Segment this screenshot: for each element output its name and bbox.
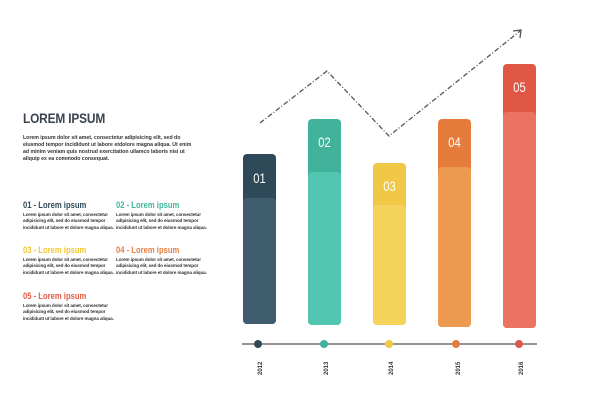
item 03 [23,245,114,275]
item 01: Lorem ipsum dolor sit amet, consectetur adipisicing elit, sed do eiusmod tempor incididunt ut labore et dolore magna aliqua. [23,212,114,230]
item 03: 03 - Lorem ipsum [23,245,86,255]
arrow: trend line [260,30,521,136]
bar 05: 05 [513,80,526,95]
bar 01: 01 [253,171,266,186]
item 02: Lorem ipsum dolor sit amet, consectetur adipisicing elit, sed do eiusmod tempor incididunt ut labore et dolore magna aliqua. [116,212,207,230]
bar 04: 04 [448,135,461,150]
bar 05 [503,64,536,328]
item 01 [23,200,114,230]
item 03: Lorem ipsum dolor sit amet, consectetur adipisicing elit, sed do eiusmod tempor incididunt ut labore et dolore magna aliqua. [23,257,114,275]
item 04: Lorem ipsum dolor sit amet, consectetur adipisicing elit, sed do eiusmod tempor incididunt ut labore et dolore magna aliqua. [116,257,207,275]
year labels: 2016 [519,361,525,375]
intro text: Lorem ipsum dolor sit amet, consectetur adipisicing elit, sed do eiusmod tempor incididunt ut labore etdolore magna aliqua. Ut enim ad minim veniam quis nostrud exercitation ullamco laboris nisi ut aliquip ex ea commodo consequat. [23,135,191,162]
item 04: 04 - Lorem ipsum [116,245,179,255]
bar 02: 02 [318,135,331,150]
year labels [258,361,525,375]
bar 03: 03 [383,179,396,194]
item 02: 02 - Lorem ipsum [116,200,179,210]
bar 01 [243,154,276,324]
year labels: 2013 [324,361,330,375]
item 04 [116,245,207,275]
item 02 [116,200,207,230]
item 05: Lorem ipsum dolor sit amet, consectetur adipisicing elit, sed do eiusmod tempor incididunt ut labore et dolore magna aliqua. [23,303,114,321]
year labels: 2015 [456,361,462,375]
title: LOREM IPSUM [23,110,105,126]
bar 02 [308,119,341,325]
year labels: 2014 [389,361,395,375]
item 05: 05 - Lorem ipsum [23,291,86,301]
timeline axis [242,340,537,348]
bar 04 [438,119,471,327]
item 01: 01 - Lorem ipsum [23,200,86,210]
item 05 [23,291,114,321]
year labels: 2012 [258,361,264,375]
bar 03 [373,163,406,325]
